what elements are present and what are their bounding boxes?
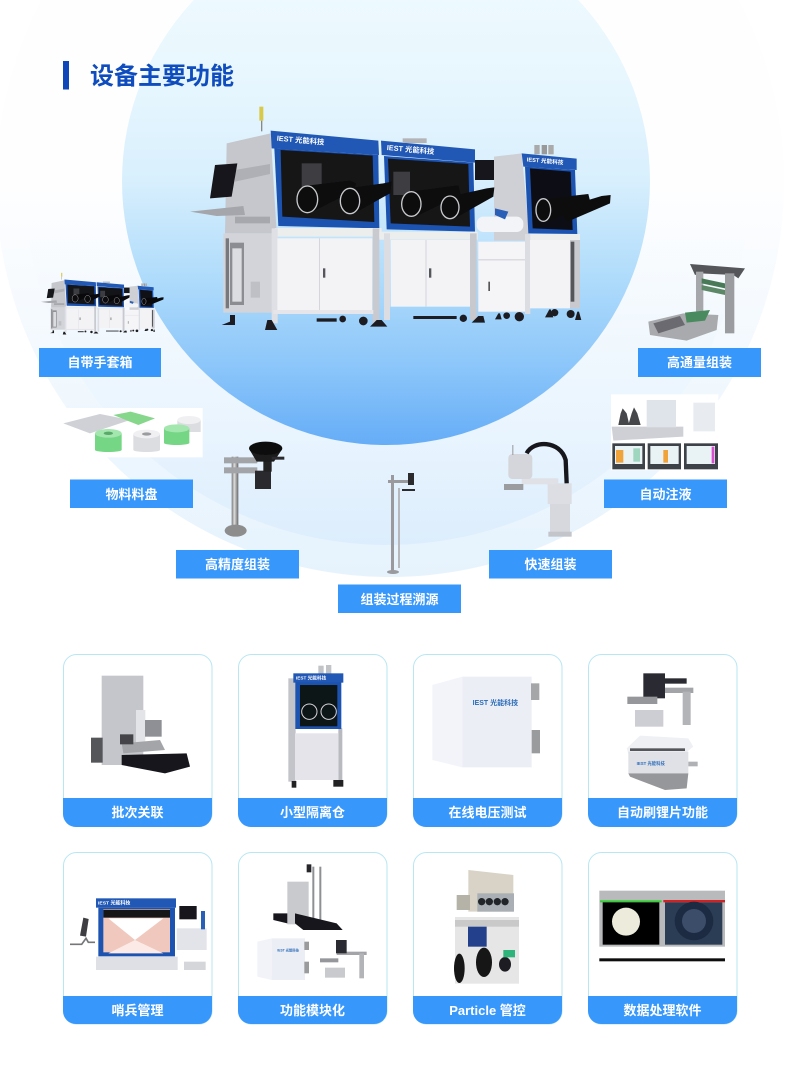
icon: material trays bbox=[60, 408, 203, 457]
label bar: sentinel management bbox=[63, 996, 212, 1024]
image: small isolator bbox=[288, 665, 343, 788]
label: assembly traceability: 组装过程溯源 bbox=[360, 592, 439, 607]
icon: precision arm bbox=[224, 442, 284, 537]
image: particle control photos bbox=[454, 870, 519, 984]
image: white voltage test box bbox=[432, 677, 540, 767]
feature: automatic electrolyte injection bbox=[604, 394, 727, 508]
card: small isolation chamber bbox=[238, 654, 387, 827]
main machine: glovebox assembly line bbox=[190, 107, 611, 330]
label: material tray bbox=[70, 480, 193, 508]
label: material tray: 物料料盘 bbox=[105, 487, 158, 502]
label: high throughput assembly: 高通量组装 bbox=[667, 355, 732, 370]
image: sentinel chamber: IEST 光能科技 bbox=[98, 899, 130, 906]
card: automatic lithium brushing bbox=[588, 654, 737, 827]
image: module collage: IEST 光能科技 bbox=[277, 947, 300, 952]
label bar: data processing software bbox=[588, 996, 737, 1024]
label bar: automatic lithium brushing: 自动刷锂片功能 bbox=[617, 805, 708, 820]
feature: material tray bbox=[60, 408, 203, 508]
feature: assembly traceability bbox=[338, 473, 461, 613]
card: batch association bbox=[63, 654, 212, 827]
label: built-in glovebox: 自带手套箱 bbox=[67, 355, 133, 370]
card: online voltage test bbox=[413, 654, 562, 827]
label bar: data processing software: 数据处理软件 bbox=[623, 1003, 702, 1018]
label bar: batch association: 批次关联 bbox=[111, 805, 164, 820]
label bar: small isolation chamber bbox=[238, 798, 387, 827]
label bar: particle control bbox=[413, 996, 562, 1024]
feature: high throughput assembly bbox=[638, 264, 761, 377]
main machine: glovebox assembly line: IEST 光能科技 bbox=[526, 155, 564, 167]
feature: built-in glovebox bbox=[39, 273, 164, 377]
label: high precision assembly: 高精度组装 bbox=[205, 557, 270, 572]
label bar: particle control: Particle 管控 bbox=[449, 1003, 526, 1018]
feature: fast assembly bbox=[489, 444, 612, 578]
label bar: batch association bbox=[63, 798, 212, 827]
image: software screenshot bbox=[599, 891, 725, 961]
label bar: sentinel management: 哨兵管理 bbox=[111, 1003, 164, 1018]
icon: SCARA robot bbox=[504, 444, 572, 537]
image: small isolator: IEST 光能科技 bbox=[296, 675, 327, 682]
image: module collage bbox=[257, 864, 367, 980]
label bar: online voltage test: 在线电压测试 bbox=[448, 805, 527, 820]
image: white voltage test box: IEST 光能科技 bbox=[473, 698, 518, 707]
feature: high precision assembly bbox=[176, 442, 299, 578]
label bar: automatic lithium brushing bbox=[588, 798, 737, 827]
label bar: online voltage test bbox=[413, 798, 562, 827]
label: fast assembly: 快速组装 bbox=[524, 557, 577, 572]
label bar: modular functions bbox=[238, 996, 387, 1024]
label bar: small isolation chamber: 小型隔离仓 bbox=[280, 805, 345, 820]
icon: injection unit and screens bbox=[611, 394, 718, 470]
image: gantry and plate bbox=[627, 673, 698, 790]
main machine: glovebox assembly line: IEST 光能科技 bbox=[386, 143, 435, 156]
label: automatic injection: 自动注液 bbox=[639, 487, 692, 502]
card: sentinel management bbox=[63, 852, 212, 1024]
image: gantry and plate: IEST 光能科技 bbox=[637, 760, 665, 767]
background: concentric circles bbox=[0, 0, 784, 577]
card: data processing software bbox=[588, 852, 737, 1024]
icon: traceability pole bbox=[387, 473, 415, 574]
image: batch machine bbox=[91, 676, 190, 773]
label bar: modular functions: 功能模块化 bbox=[280, 1003, 345, 1018]
card: particle control bbox=[413, 852, 562, 1024]
icon: glovebox thumbnail bbox=[41, 273, 164, 334]
card: modular functions bbox=[238, 852, 387, 1024]
image: sentinel chamber bbox=[70, 898, 207, 970]
icon: throughput gripper bbox=[648, 264, 745, 341]
heading: section title: 设备主要功能 bbox=[90, 63, 234, 90]
main machine: glovebox assembly line: IEST 光能科技 bbox=[276, 134, 325, 147]
